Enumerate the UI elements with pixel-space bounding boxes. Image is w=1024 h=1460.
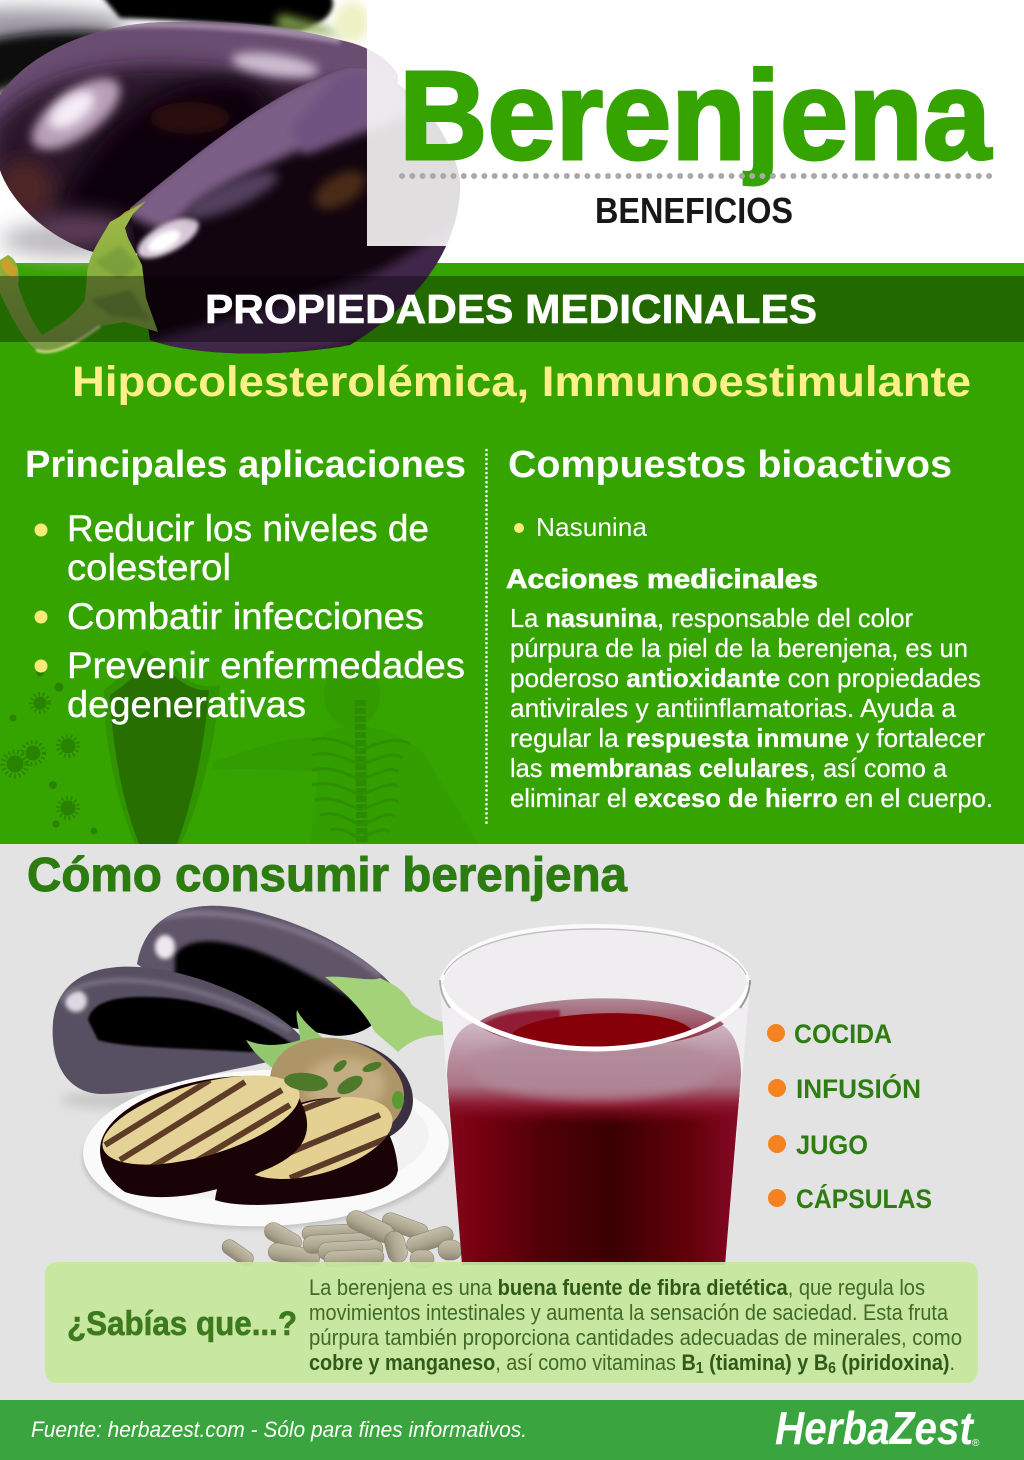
callout text: movimientos intestinales y aumenta la sensación de saciedad. Esta fruta — [309, 1300, 948, 1325]
right slice — [215, 1097, 398, 1205]
column heading: Compuestos bioactivos — [508, 444, 952, 486]
back eggplant — [137, 906, 390, 1036]
front eggplant — [52, 966, 300, 1094]
banner: propiedades medicinales: PROPIEDADES MEDICINALES — [205, 286, 817, 332]
grey consumption section background — [0, 844, 1024, 1400]
juice below the meniscus — [440, 1015, 750, 1270]
callout text: cobre y manganeso, así como vitaminas B — [309, 1350, 700, 1375]
item: infusion: INFUSIÓN — [796, 1073, 921, 1104]
bullet list: colesterol — [67, 547, 231, 588]
banner: propiedades medicinales — [0, 276, 1024, 342]
column: principales aplicaciones — [25, 444, 466, 725]
photo: header eggplants — [0, 0, 470, 370]
left slice — [100, 1075, 308, 1198]
callout text: 1 — [696, 1360, 704, 1377]
watermark: shield — [104, 650, 220, 844]
paragraph: medicinal actions: púrpura de la piel de la berenjena, es un — [510, 633, 968, 663]
item: jugo: JUGO — [796, 1130, 868, 1160]
subtitle: BENEFICIOS: BENEFICIOS — [595, 190, 793, 231]
bullet list: Prevenir enfermedades — [67, 645, 465, 686]
callout text: . — [949, 1350, 956, 1375]
callout: sabias que — [45, 1262, 978, 1383]
watermark: virus particles — [3, 670, 97, 834]
back dark eggplant — [0, 0, 370, 100]
front eggplant — [130, 67, 460, 354]
callout text: púrpura también proporciona cantidades adecuadas de minerales, como — [309, 1325, 962, 1350]
photo: capsules — [219, 1207, 462, 1269]
bullet list: degenerativas — [67, 684, 306, 725]
heading: medicinal properties: Hipocolesterolémica, Immunoestimulante — [72, 358, 971, 406]
juice surface — [476, 998, 724, 1048]
callout text — [309, 1275, 962, 1377]
compound item: Nasunina — [536, 512, 648, 542]
logo: HerbaZest: ® — [972, 1438, 980, 1449]
glass body — [440, 987, 750, 1265]
logo: HerbaZest: HerbaZest — [775, 1402, 974, 1454]
item: capsulas: CÁPSULAS — [796, 1183, 932, 1214]
item: cocida: COCIDA — [794, 1019, 892, 1049]
subheading: acciones medicinales: Acciones medicinales — [506, 564, 818, 594]
item: jugo — [768, 1130, 868, 1160]
photo: plate with grilled eggplant slices — [79, 1024, 455, 1235]
bullet list: Combatir infecciones — [67, 596, 424, 637]
column heading: Principales aplicaciones — [25, 444, 466, 486]
heading: como consumir: Cómo consumir berenjena — [27, 849, 627, 902]
main eggplant — [0, 22, 398, 254]
column: compuestos bioactivos — [506, 444, 993, 813]
dotted column divider — [485, 450, 488, 823]
list: consumption forms — [767, 1019, 932, 1214]
paragraph: medicinal actions: antivirales y antiinflamatorias. Ayuda a — [510, 693, 957, 723]
callout text: La berenjena es una buena fuente de fibra dietética, que regula los — [309, 1275, 925, 1300]
photo: glass of juice — [440, 925, 750, 1270]
paragraph: medicinal actions: La nasunina, responsable del color — [510, 603, 913, 633]
translucent white title panel — [367, 0, 547, 246]
glass rim — [441, 985, 749, 1049]
title: Berenjena: Berenjena — [399, 45, 992, 186]
bullet list — [34, 508, 465, 725]
cast shadow — [0, 222, 140, 258]
dotted divider under title — [402, 173, 996, 179]
stem and calyx — [0, 201, 158, 352]
footer source text: Fuente: herbazest.com - Sólo para fines informativos. — [31, 1417, 527, 1442]
parsley garnish — [283, 1058, 404, 1109]
paragraph: medicinal actions: las membranas celulares, así como a — [510, 753, 948, 783]
paragraph: medicinal actions: regular la respuesta inmune y fortalecer — [510, 723, 985, 753]
callout text: (piridoxina) — [836, 1350, 949, 1375]
back slice — [259, 1024, 424, 1160]
calyx — [325, 977, 443, 1052]
paragraph: medicinal actions: poderoso antioxidante con propiedades — [510, 663, 981, 693]
green medicinal section background — [0, 263, 1024, 844]
paragraph: medicinal actions — [510, 603, 993, 813]
watermark: immune defence illustration — [3, 650, 478, 844]
watermark: skeleton — [213, 660, 478, 844]
paragraph: medicinal actions: eliminar el exceso de hierro en el cuerpo. — [510, 783, 993, 813]
callout text: (tiamina) y B — [704, 1350, 828, 1375]
callout title: ¿Sabías que...? — [67, 1305, 297, 1343]
bullet list: Reducir los niveles de — [67, 508, 429, 549]
plate — [79, 1064, 455, 1235]
footer bar — [0, 1400, 1024, 1460]
cast shadow — [60, 1091, 180, 1109]
callout text: 6 — [828, 1360, 836, 1377]
photo: whole eggplants — [45, 895, 443, 1109]
